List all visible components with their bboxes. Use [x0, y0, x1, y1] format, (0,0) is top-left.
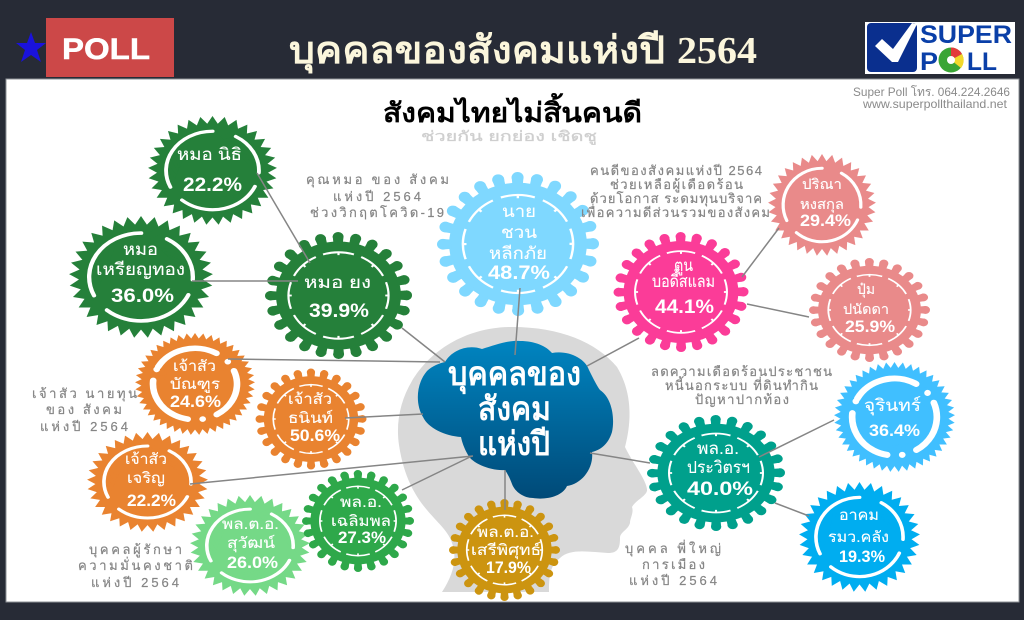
gear: พล.ต.อ. เสรีพิศุทธ์ — [453, 503, 556, 597]
gear: เจ้าสัว ธนินท์: 50.6% — [290, 426, 340, 445]
title: 2564 — [677, 30, 757, 72]
gear: ปุ๋ม ปนัดดา — [813, 262, 926, 358]
text: good people of society: คนดีของสังคมแห่งปี 2564 — [590, 163, 762, 178]
gear: ปริณา หงสกุล — [768, 138, 893, 263]
gear: จุรินทร์: จุรินทร์ — [864, 396, 921, 416]
contact details: www.superpollthailand.net — [862, 97, 1008, 111]
central label — [448, 355, 581, 462]
text: tycoons: ของ สังคม — [46, 402, 122, 417]
gear: อาคม รมว.คลัง: รมว.คลัง — [828, 529, 889, 546]
text: good people of society: ช่วยเหลือผู้เดือดร้อน — [610, 177, 743, 193]
gear: หมอ ยง: 39.9% — [309, 301, 369, 322]
gear: เจ้าสัว บัณฑูร — [135, 317, 274, 444]
gear: อาคม รมว.คลัง: อาคม — [839, 507, 879, 524]
gear: เจ้าสัว บัณฑูร: 24.6% — [170, 392, 221, 411]
connector lines — [190, 173, 834, 516]
title: บุคคลของสังคมแห่งปี — [289, 30, 665, 74]
text: tycoons: เจ้าสัว นายทุน — [32, 386, 137, 402]
text: political big brother: การเมือง — [642, 557, 705, 572]
gear: พล.อ. ประวิตรฯ — [652, 419, 780, 527]
gear: ปริณา หงสกุล: 29.4% — [800, 211, 851, 230]
text: relieving hardship: ลดความเดือดร้อนประชาชน — [651, 364, 832, 379]
text: doctors of society: แห่งปี 2564 — [333, 189, 421, 204]
gear: อาคม รมว.คลัง — [799, 464, 939, 600]
gear: พล.ต.อ. เสรีพิศุทธ์: พล.ต.อ. — [477, 524, 534, 541]
gear: เจ้าสัว เจริญ: เจ้าสัว — [125, 451, 167, 468]
text: doctors of society: คุณหมอ ของ สังคม — [306, 172, 449, 188]
text: doctors of society — [306, 172, 449, 220]
gear: เจ้าสัว ธนินท์: ธนินท์ — [288, 410, 333, 427]
gear: พล.อ. เฉลิมพล: เฉลิมพล — [331, 513, 391, 530]
gear: ตูน บอดี้สแลม: 44.1% — [655, 297, 714, 318]
text: national security: ความมั่นคงชาติ — [78, 557, 193, 573]
gear: ปริณา หงสกุล: ปริณา — [802, 176, 842, 192]
badge: POLL: POLL — [62, 33, 150, 66]
text: relieving hardship — [651, 364, 832, 407]
contact details: Super Poll โทร. 064.224.2646 — [853, 85, 1010, 99]
gear: จุรินทร์: 36.4% — [869, 421, 920, 440]
gear: พล.อ. เฉลิมพล — [306, 474, 410, 568]
gear: เจ้าสัว เจริญ: เจริญ — [127, 470, 165, 487]
text: good people of society: เพื่อความดีส่วนรวมของสังคม — [581, 204, 770, 220]
gear: จุรินทร์ — [834, 344, 975, 482]
gear: นาย ชวน หลีกภัย — [443, 177, 593, 311]
text: tycoons — [32, 386, 137, 434]
icon: blue star — [16, 32, 46, 62]
gear: หมอ นิธิ: หมอ นิธิ — [177, 145, 242, 164]
gear: พล.ต.อ. เสรีพิศุทธ์: 17.9% — [486, 558, 531, 577]
text: relieving hardship: หนี้นอกระบบ ที่ดินทำกิน — [665, 376, 818, 393]
gear: เจ้าสัว เจริญ — [87, 416, 227, 539]
text: relieving hardship: ปัญหาปากท้อง — [695, 392, 789, 407]
gear: หมอ ยง — [270, 237, 407, 354]
gear: ตูน บอดี้สแลม: ตูน — [674, 256, 693, 276]
gear: นาย ชวน หลีกภัย: หลีกภัย — [489, 244, 547, 263]
gear: เจ้าสัว ธนินท์ — [260, 372, 362, 466]
subheading: ช่วยกัน ยกย่อง เชิดชู — [421, 128, 597, 145]
gear: นาย ชวน หลีกภัย: 48.7% — [488, 263, 550, 284]
text: tycoons: แห่งปี 2564 — [40, 419, 128, 434]
gear: พล.ต.อ. เสรีพิศุทธ์: เสรีพิศุทธ์ — [471, 542, 541, 560]
logo: Super Poll: SUPER — [920, 21, 1012, 49]
gear: หมอ เหรียญทอง: หมอ — [123, 240, 158, 259]
gear: พล.อ. ประวิตรฯ: พล.อ. — [697, 439, 739, 458]
text: good people of society: ด้วยโอกาส ระดมทุนบริจาค — [590, 191, 762, 207]
gear: ปริณา หงสกุล: หงสกุล — [800, 196, 844, 213]
gear: พล.ต.อ. สุวัฒน์: พล.ต.อ. — [222, 516, 279, 533]
text: political big brother — [625, 540, 721, 588]
text: doctors of society: ช่วงวิกฤตโควิด-19 — [310, 205, 444, 220]
gear: พล.อ. ประวิตรฯ: ประวิตรฯ — [687, 458, 750, 477]
text: national security — [78, 542, 193, 590]
gear: หมอ เหรียญทอง — [69, 196, 236, 347]
contact details — [853, 85, 1010, 111]
gear: พล.อ. เฉลิมพล: พล.อ. — [340, 494, 382, 511]
gear: ตูน บอดี้สแลม: บอดี้สแลม — [652, 269, 715, 291]
logo: Super Poll: P — [920, 48, 938, 76]
brain cloud — [418, 341, 613, 499]
gear: อาคม รมว.คลัง: 19.3% — [839, 547, 885, 566]
text: political big brother: บุคคล พี่ใหญ่ — [625, 540, 721, 557]
gear: พล.ต.อ. สุวัฒน์: สุวัฒน์ — [227, 535, 275, 553]
gear: พล.อ. เฉลิมพล: 27.3% — [338, 528, 386, 547]
gear: นาย ชวน หลีกภัย: นาย — [502, 202, 536, 221]
logo: Super Poll — [865, 21, 1015, 76]
gear: เจ้าสัว เจริญ: 22.2% — [127, 491, 176, 510]
gear: หมอ นิธิ — [148, 98, 297, 233]
gear: หมอ เหรียญทอง: เหรียญทอง — [96, 260, 185, 279]
heading: สังคมไทยไม่สิ้นคนดี — [383, 92, 642, 128]
text: national security: บุคคลผู้รักษา — [89, 542, 182, 558]
gear: ปุ๋ม ปนัดดา: ปนัดดา — [843, 301, 889, 317]
text: good people of society — [581, 163, 770, 220]
text: political big brother: แห่งปี 2564 — [629, 573, 717, 588]
text: national security: แห่งปี 2564 — [91, 575, 179, 590]
central label: บุคคลของ — [448, 355, 581, 395]
gear: เจ้าสัว บัณฑูร: บัณฑูร — [170, 376, 220, 393]
gear: หมอ เหรียญทอง: 36.0% — [111, 286, 174, 307]
gear: ตูน บอดี้สแลม — [618, 236, 744, 348]
gear: นาย ชวน หลีกภัย: ชวน — [501, 223, 537, 242]
central label: สังคม — [478, 390, 551, 427]
central label: แห่งปี — [478, 425, 550, 462]
gear: พล.ต.อ. สุวัฒน์: 26.0% — [227, 553, 278, 572]
badge: POLL — [46, 18, 174, 77]
gear: หมอ ยง: หมอ ยง — [304, 273, 371, 292]
logo: Super Poll: LL — [967, 48, 997, 76]
gear: ปุ๋ม ปนัดดา: 25.9% — [845, 317, 895, 336]
gear: หมอ นิธิ: 22.2% — [183, 175, 242, 196]
gear: เจ้าสัว บัณฑูร: เจ้าสัว — [173, 358, 216, 375]
head silhouette — [398, 327, 647, 592]
gear: พล.ต.อ. สุวัฒน์ — [190, 479, 329, 603]
gear: พล.อ. ประวิตรฯ: 40.0% — [687, 479, 753, 500]
gear: เจ้าสัว ธนินท์: เจ้าสัว — [288, 391, 332, 408]
gear: ปุ๋ม ปนัดดา: ปุ๋ม — [857, 281, 875, 298]
